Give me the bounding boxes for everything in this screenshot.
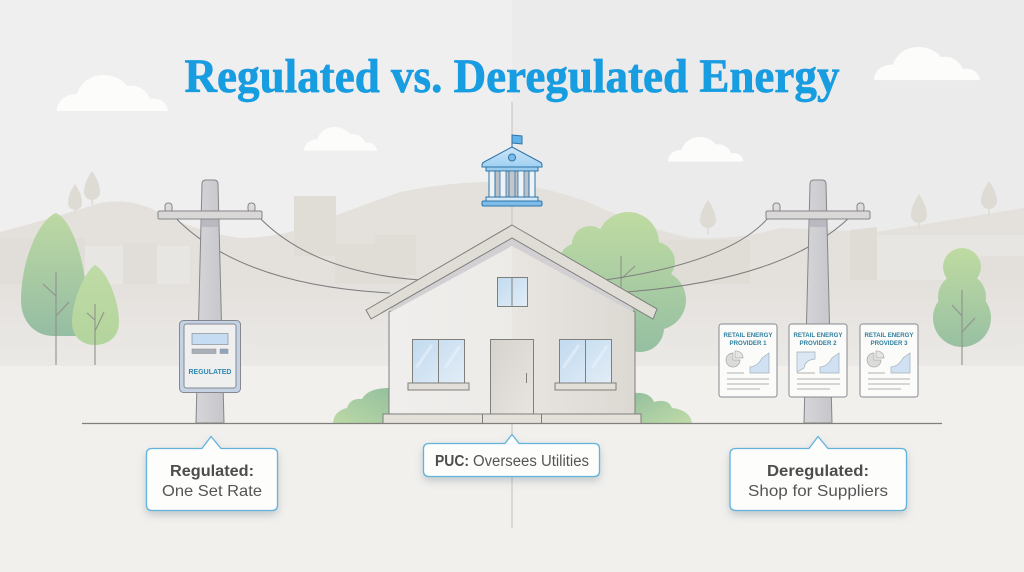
provider card 3: PROVIDER 3	[870, 341, 908, 347]
tree behind house	[559, 212, 686, 352]
house	[366, 225, 657, 424]
callout: regulated: One Set Rate	[162, 483, 262, 500]
power wires	[170, 212, 855, 293]
title: Regulated vs. Deregulated Energy	[184, 50, 840, 103]
callout: regulated	[146, 436, 278, 510]
left utility pole	[158, 180, 262, 423]
callout: deregulated	[730, 436, 906, 510]
center divider line	[511, 102, 513, 528]
cloud top left	[57, 75, 168, 111]
provider card 1: RETAIL ENERGY	[724, 333, 772, 339]
callout: deregulated: Shop for Suppliers	[748, 483, 888, 500]
cloud small left	[304, 127, 377, 151]
provider card 3: RETAIL ENERGY	[864, 333, 914, 339]
government building icon	[482, 135, 542, 206]
right utility pole	[766, 180, 870, 423]
cloud small right	[668, 137, 743, 161]
left green trees	[21, 213, 119, 365]
right green tree	[933, 248, 991, 365]
regulated meter	[180, 320, 240, 392]
distant grey trees	[68, 171, 997, 234]
ground line	[82, 422, 942, 424]
provider card 1	[719, 324, 777, 397]
callout: regulated: Regulated:	[170, 463, 254, 480]
background hills and city skyline	[0, 182, 1024, 572]
provider card 2: RETAIL ENERGY	[794, 333, 842, 339]
cloud top right	[874, 47, 980, 80]
callout: PUC: PUC:	[435, 453, 469, 470]
provider card 2	[789, 324, 847, 397]
callout: PUC	[424, 434, 600, 476]
callout: PUC: Oversees Utilities	[473, 453, 589, 470]
provider card 2: PROVIDER 2	[800, 341, 837, 347]
bushes	[333, 388, 692, 423]
regulated meter: REGULATED	[188, 367, 232, 376]
provider card 1: PROVIDER 1	[730, 341, 767, 347]
provider card 3	[860, 324, 918, 397]
callout: deregulated: Deregulated:	[767, 463, 869, 480]
